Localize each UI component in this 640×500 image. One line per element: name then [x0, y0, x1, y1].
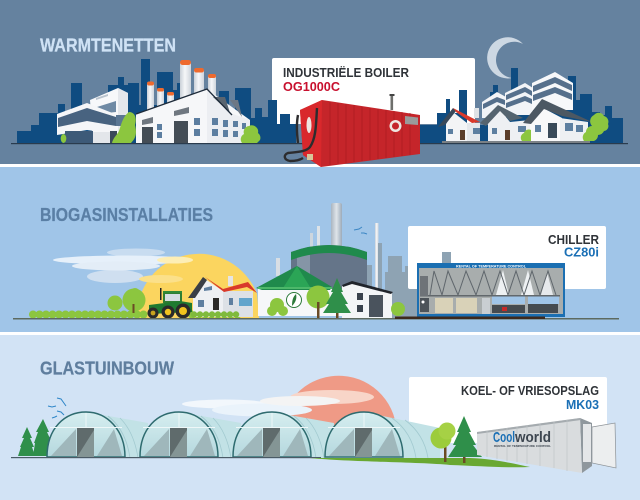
chiller unit: RENTAL OF TEMPERATURE CONTROL	[456, 264, 527, 268]
salmon sun	[281, 376, 400, 440]
panel: biogasinstallaties	[0, 167, 640, 332]
house bushes	[521, 113, 608, 141]
tractor	[148, 288, 192, 318]
heading: glastuinbouw: GLASTUINBOUW	[40, 358, 174, 378]
cold storage container: RENTAL OF TEMPERATURE CONTROL	[494, 444, 551, 448]
cold storage container: Cool	[493, 429, 515, 446]
boiler hose	[285, 108, 317, 161]
chiller unit	[417, 263, 565, 317]
trees left	[18, 419, 52, 456]
spruce	[323, 278, 351, 318]
houses	[438, 99, 592, 144]
grey tower in callout	[442, 252, 451, 264]
callout: koel- of vriesopslag: MK03	[566, 397, 599, 412]
trees by tractor	[108, 288, 146, 313]
heading: warmtenetten: WARMTENETTEN	[40, 36, 176, 56]
callout: koel- of vriesopslag	[409, 377, 607, 443]
cold storage container: world	[514, 429, 551, 446]
trees right	[430, 416, 482, 463]
house hedge	[194, 311, 242, 318]
digester building	[256, 266, 346, 316]
sun	[137, 254, 259, 318]
boiler container	[300, 94, 420, 167]
cold storage container	[477, 418, 616, 473]
factory bush	[241, 125, 260, 143]
grey skyline	[367, 256, 417, 318]
factory hall	[136, 89, 250, 143]
small tree	[61, 134, 66, 143]
callout: chiller	[408, 226, 606, 289]
grass	[310, 458, 530, 467]
greenhouse 2	[140, 412, 218, 457]
heading: biogasinstallaties: BIOGASINSTALLATIES	[40, 205, 213, 225]
ground line	[11, 457, 321, 458]
biogas tank with chimney	[276, 203, 382, 290]
greenhouse 3	[233, 412, 311, 457]
tunnels behind	[86, 412, 334, 458]
callout: chiller: CZ80i	[564, 244, 599, 260]
panel: glastuinbouw	[0, 335, 640, 500]
callout: industriele boiler	[272, 58, 475, 124]
tree	[112, 112, 136, 143]
clouds	[53, 248, 193, 283]
hedge	[33, 310, 242, 318]
panel: warmtenetten	[0, 0, 640, 167]
modern office building	[57, 88, 128, 143]
farm house	[188, 276, 257, 317]
city skyline	[17, 59, 623, 143]
greenhouse 4	[325, 412, 440, 458]
callout: koel- of vriesopslag: KOEL- OF VRIESOPSLAG	[461, 383, 599, 398]
clouds	[182, 390, 374, 416]
ground line	[11, 143, 628, 144]
greenhouse 1	[47, 412, 125, 457]
moon	[487, 37, 523, 78]
birds	[354, 227, 367, 234]
birds	[48, 398, 66, 418]
callout: industriele boiler: OG1000C	[283, 79, 341, 94]
factory chimneys	[147, 60, 216, 110]
callout: chiller: CHILLER	[548, 232, 600, 247]
apartment blocks	[482, 72, 573, 118]
shrubs and trees	[267, 286, 405, 318]
ground line	[13, 316, 619, 320]
callout: industriele boiler: INDUSTRIËLE BOILER	[283, 65, 410, 80]
white hall	[342, 281, 393, 318]
